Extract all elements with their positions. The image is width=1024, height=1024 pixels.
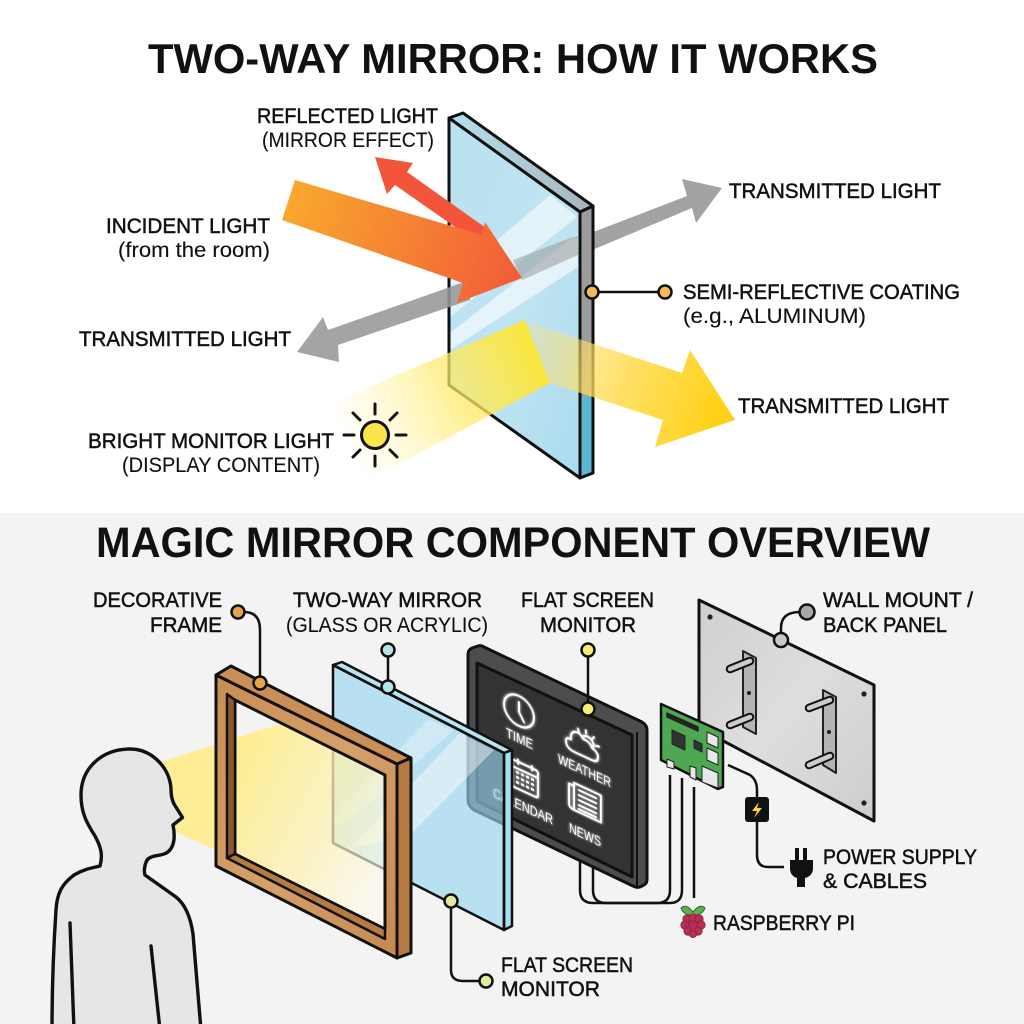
callout: bottom flat screen monitor connector: [444, 894, 492, 988]
label: wall mount / back panel: [823, 589, 973, 637]
label: flat screen monitor bottom: MONITOR: [501, 978, 600, 1001]
label: decorative frame: DECORATIVE: [93, 589, 222, 612]
two-way mirror pane: [333, 662, 512, 930]
callout: flat screen monitor connector: [582, 644, 594, 716]
callout: wall mount connector: [774, 604, 814, 647]
label: reflected light: [257, 105, 438, 152]
arrow: incident light, orange: [282, 180, 522, 303]
icon: weather: [566, 721, 599, 763]
icon: clock: [504, 689, 534, 733]
raspberry pi board: [661, 704, 723, 789]
callout: two-way mirror connector: [382, 644, 394, 694]
label: bright monitor light: (DISPLAY CONTENT): [122, 454, 320, 477]
decorative wooden frame: [216, 666, 411, 958]
power cable with adapter: [728, 765, 813, 887]
arrow: reflected light, red: [375, 157, 486, 243]
label: semi-reflective coating: SEMI-REFLECTIVE COATING: [683, 281, 960, 304]
icon: power adapter: [745, 797, 769, 822]
arrow: transmitted light, gray, pointing left: [297, 280, 470, 362]
icon: sun: [344, 404, 406, 466]
label: two-way mirror: (GLASS OR ACRYLIC): [286, 614, 488, 637]
title: two-way mirror: TWO-WAY MIRROR: HOW IT WORKS: [148, 35, 878, 82]
bracket: right: [809, 690, 836, 773]
icon: calendar: [512, 756, 538, 798]
label: weather: WEATHER: [558, 752, 611, 791]
label: transmitted light bottom right: TRANSMITTED LIGHT: [738, 395, 949, 418]
person silhouette: [52, 749, 201, 1024]
label: two-way mirror: [286, 589, 488, 637]
label: wall mount / back panel: WALL MOUNT /: [823, 589, 973, 612]
icon: plug: [790, 848, 813, 887]
label: reflected light: REFLECTED LIGHT: [257, 105, 438, 128]
icon: raspberry: [681, 906, 705, 938]
label: transmitted light top right: TRANSMITTED LIGHT: [729, 180, 941, 203]
glass pane: [449, 113, 593, 478]
label: bright monitor light: BRIGHT MONITOR LIGHT: [88, 430, 334, 453]
label: wall mount / back panel: BACK PANEL: [823, 614, 947, 637]
background: bottom section: [0, 513, 1024, 1024]
label: flat screen monitor top: [521, 589, 654, 637]
label: two-way mirror: TWO-WAY MIRROR: [293, 589, 482, 612]
bracket: left: [730, 651, 756, 734]
flat screen monitor with dashboard: [468, 646, 647, 887]
label: incident light: (from the room): [118, 239, 270, 262]
arrow: transmitted monitor light, yellow: [527, 322, 735, 447]
label: semi-reflective coating: (e.g., ALUMINUM): [683, 305, 866, 328]
label: flat screen monitor bottom: [501, 954, 633, 1001]
cables from raspberry pi to monitor: [580, 775, 694, 903]
beam: sight line from eye to frame: [160, 738, 235, 858]
diagram: how a two-way mirror works: [282, 113, 735, 482]
label: incident light: [106, 215, 270, 262]
label: bright monitor light: [88, 430, 334, 477]
label: flat screen monitor top: MONITOR: [540, 614, 636, 637]
label: power supply and cables: [823, 846, 977, 893]
title: component overview: MAGIC MIRROR COMPONENT OVERVIEW: [96, 519, 930, 567]
label: flat screen monitor bottom: FLAT SCREEN: [501, 954, 633, 977]
label: decorative frame: [93, 589, 222, 637]
callout: semi-reflective coating connector: [586, 286, 672, 298]
label: raspberry pi: RASPBERRY PI: [713, 912, 855, 935]
arrow: transmitted light, gray, pointing right: [575, 179, 722, 256]
label: flat screen monitor top: FLAT SCREEN: [521, 589, 654, 612]
label: news: NEWS: [569, 821, 601, 851]
callout: decorative frame connector: [232, 606, 266, 690]
wall mount back panel: [699, 600, 874, 821]
label: semi-reflective coating: [683, 281, 960, 328]
label: power supply and cables: & CABLES: [823, 870, 927, 893]
label: transmitted light left: TRANSMITTED LIGHT: [79, 328, 291, 351]
label: decorative frame: FRAME: [150, 614, 222, 637]
label: time: TIME: [506, 726, 533, 753]
label: incident light: INCIDENT LIGHT: [106, 215, 270, 238]
background: top section: [0, 0, 1024, 513]
label: power supply and cables: POWER SUPPLY: [823, 846, 977, 869]
beam: bright monitor light entering: [328, 320, 550, 482]
icon: newspaper: [569, 781, 601, 822]
label: calendar: CALENDAR: [493, 786, 553, 829]
label: reflected light: (MIRROR EFFECT): [262, 129, 434, 152]
